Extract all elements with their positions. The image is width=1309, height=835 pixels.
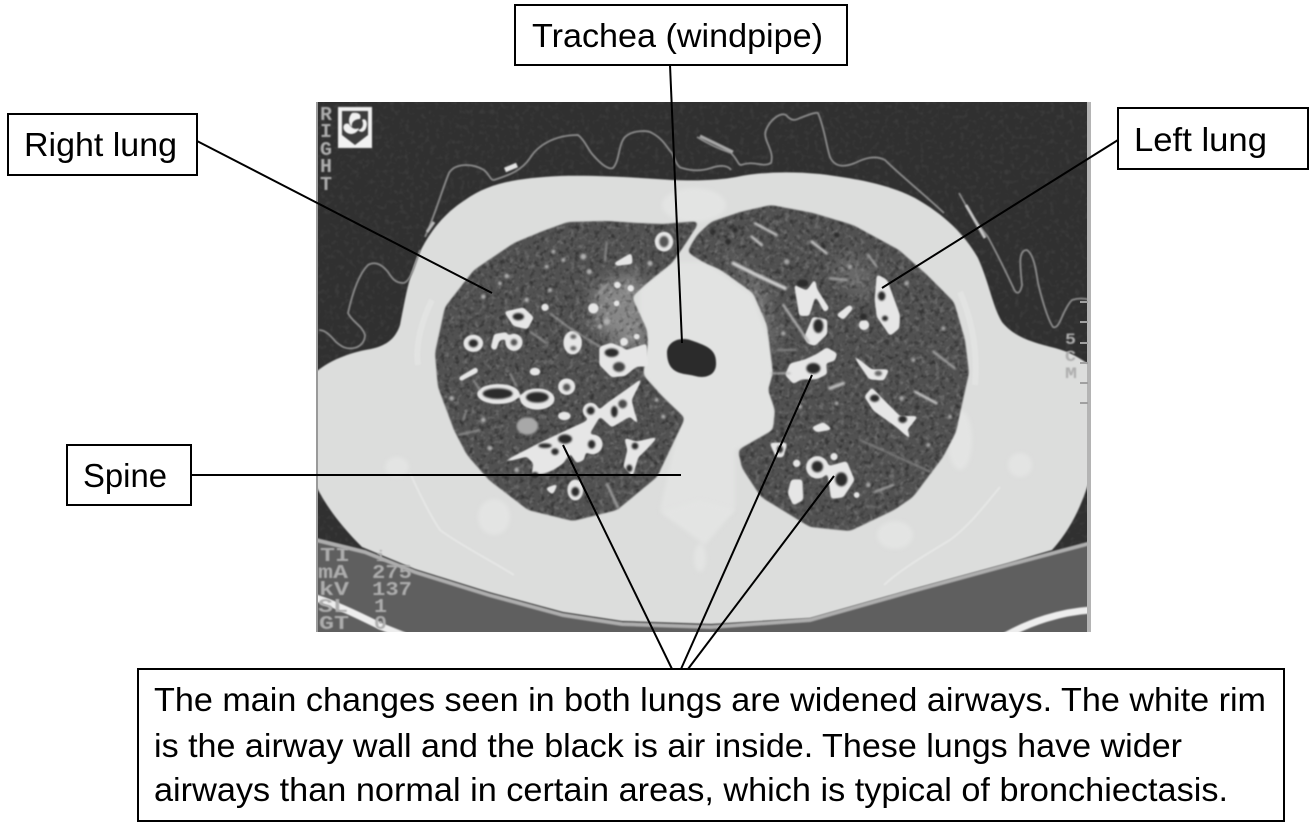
scanner parameters: i: [376, 549, 385, 566]
table rim lines: [316, 540, 1091, 636]
scanner parameters: GT: [319, 613, 349, 635]
scale text: [1065, 332, 1076, 378]
scale text: C: [1065, 348, 1076, 366]
label: right lung: Right lung: [24, 126, 177, 163]
explanation callout: airways than normal in certain areas, which is typical of bronchiectasis.: [154, 771, 1228, 808]
image edge strips: [316, 102, 318, 632]
mediastinum: [640, 262, 775, 535]
scanner parameters: mA: [318, 562, 349, 584]
airway lumens: [711, 227, 907, 486]
hazy nodule: [517, 417, 538, 435]
label: spine: Spine: [83, 457, 167, 494]
small vessels right: [458, 242, 618, 508]
scanner parameters: 275: [372, 562, 412, 584]
CT scan image: [316, 102, 1091, 636]
explanation callout: is the airway wall and the black is air inside. These lungs have wider: [154, 727, 1182, 764]
body outline: [316, 172, 1091, 624]
label: spine: [67, 445, 191, 505]
label: trachea: Trachea (windpipe): [532, 17, 823, 54]
scanner parameters: 1: [374, 596, 387, 618]
label: left lung: Left lung: [1134, 121, 1267, 158]
vessels left: [733, 223, 955, 492]
leader line: left lung: [882, 140, 1118, 288]
bone patches: [702, 531, 712, 539]
trachea: [667, 339, 716, 377]
leader line: spine: [191, 474, 681, 476]
label: right lung: [8, 114, 197, 175]
scanner parameters: TI: [320, 545, 350, 567]
left lung airways: [711, 223, 955, 506]
RIGHT orientation text: G: [320, 139, 332, 161]
scale text: 5: [1065, 331, 1076, 349]
scanner parameters: 137: [372, 579, 412, 601]
label: trachea: [515, 5, 847, 65]
RIGHT orientation text: R: [320, 104, 333, 126]
scanner parameters: [318, 545, 412, 635]
leader line: trachea: [670, 65, 682, 343]
explanation callout: The main changes seen in both lungs are widened airways. The white rim: [154, 681, 1266, 718]
scanner parameters: kV: [319, 579, 350, 601]
right lung: [434, 220, 698, 522]
RIGHT orientation text: H: [320, 156, 332, 178]
skin lines: [319, 113, 1090, 348]
RIGHT orientation text: T: [320, 174, 332, 196]
RIGHT orientation text: I: [320, 121, 332, 143]
airway lumens: [469, 236, 669, 496]
table band below body: [316, 540, 1091, 632]
scan background: [316, 102, 1091, 632]
scanner parameters: 0: [374, 613, 387, 635]
right lung airways: [449, 232, 673, 508]
hazy region: [590, 270, 650, 350]
leader lines: widened airways: [563, 375, 834, 669]
airway walls: [458, 232, 673, 501]
leader line: right lung: [197, 141, 492, 293]
scale text: M: [1065, 365, 1077, 383]
scanner parameters: SL: [318, 596, 348, 618]
orientation logo: [338, 107, 372, 148]
label: left lung: [1118, 108, 1308, 169]
left lung: [680, 200, 980, 540]
RIGHT orientation text: [320, 104, 333, 196]
airway walls: [769, 274, 918, 506]
explanation callout: [138, 669, 1284, 821]
bones and soft tissue marks: [412, 476, 1000, 584]
right-hand scale ticks: [1080, 302, 1088, 403]
